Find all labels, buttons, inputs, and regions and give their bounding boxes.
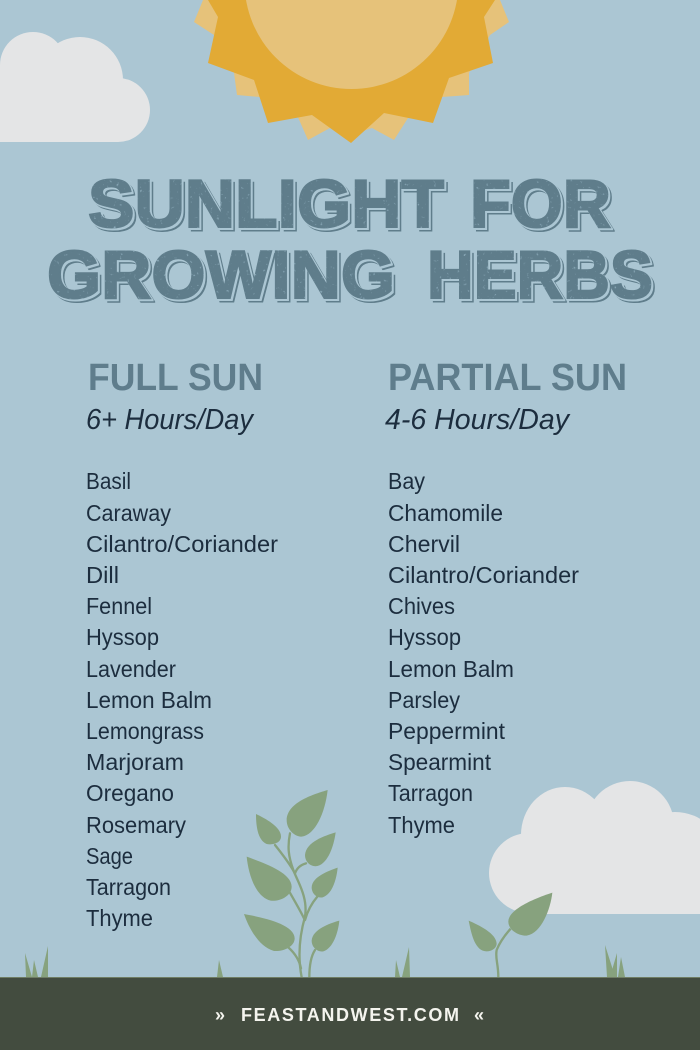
title: SUNLIGHT — [88, 166, 444, 242]
list: full sun herbs: Tarragon — [86, 874, 171, 900]
icon: cloud top left — [0, 32, 150, 142]
title: GROWING — [47, 237, 395, 313]
list: full sun herbs: Hyssop — [86, 624, 159, 650]
list: partial sun herbs: Peppermint — [388, 718, 506, 744]
icon: small seedling — [469, 893, 552, 977]
icon: tall herb plant — [244, 790, 339, 977]
subheading: 6+ hours: 6+ Hours/Day — [86, 404, 254, 436]
icon: sun — [194, 0, 509, 143]
list: partial sun herbs: Chervil — [388, 531, 460, 557]
heading: partial sun: PARTIAL SUN — [388, 357, 627, 399]
title: HERBS — [427, 237, 653, 313]
footer left chevrons: » — [215, 1005, 225, 1025]
heading: full sun: FULL SUN — [88, 357, 263, 399]
footer band — [0, 977, 700, 1050]
list: full sun herbs: Thyme — [86, 905, 153, 931]
list: full sun herbs: Lemongrass — [86, 718, 204, 744]
list: full sun herbs: Oregano — [86, 780, 174, 806]
list: partial sun herbs: Chives — [388, 593, 455, 619]
list: full sun herbs: Rosemary — [86, 812, 186, 838]
list: partial sun herbs: Bay — [388, 468, 425, 494]
list: full sun herbs: Marjoram — [86, 749, 184, 775]
list: partial sun herbs: Parsley — [388, 687, 460, 713]
list: full sun herbs: Lemon Balm — [86, 687, 212, 713]
title: FOR — [470, 166, 611, 242]
list: partial sun herbs: Thyme — [388, 812, 455, 838]
list: partial sun herbs: Chamomile — [388, 500, 503, 526]
panel: full sun — [86, 357, 278, 931]
list: partial sun herbs: Tarragon — [388, 780, 473, 806]
list: partial sun herbs: Lemon Balm — [388, 656, 514, 682]
list: full sun herbs: Cilantro/Coriander — [86, 531, 278, 557]
list: full sun herbs: Fennel — [86, 593, 152, 619]
list: full sun herbs — [86, 468, 278, 931]
footer right chevrons: « — [474, 1005, 484, 1025]
list: partial sun herbs: Hyssop — [388, 624, 461, 650]
list: partial sun herbs: Cilantro/Coriander — [388, 562, 579, 588]
panel: partial sun — [385, 357, 627, 838]
icon: grass tufts — [25, 945, 625, 977]
list: full sun herbs: Sage — [86, 843, 133, 869]
list: partial sun herbs — [388, 468, 579, 838]
subheading: 4-6 hours: 4-6 Hours/Day — [385, 404, 570, 436]
list: full sun herbs: Caraway — [86, 500, 171, 526]
footer website text: FEASTANDWEST.COM — [241, 1005, 459, 1025]
list: partial sun herbs: Spearmint — [388, 749, 492, 775]
list: full sun herbs: Dill — [86, 562, 119, 588]
title — [47, 166, 653, 313]
list: full sun herbs: Lavender — [86, 656, 176, 682]
icon: cloud bottom right — [489, 781, 700, 914]
list: full sun herbs: Basil — [86, 468, 131, 494]
